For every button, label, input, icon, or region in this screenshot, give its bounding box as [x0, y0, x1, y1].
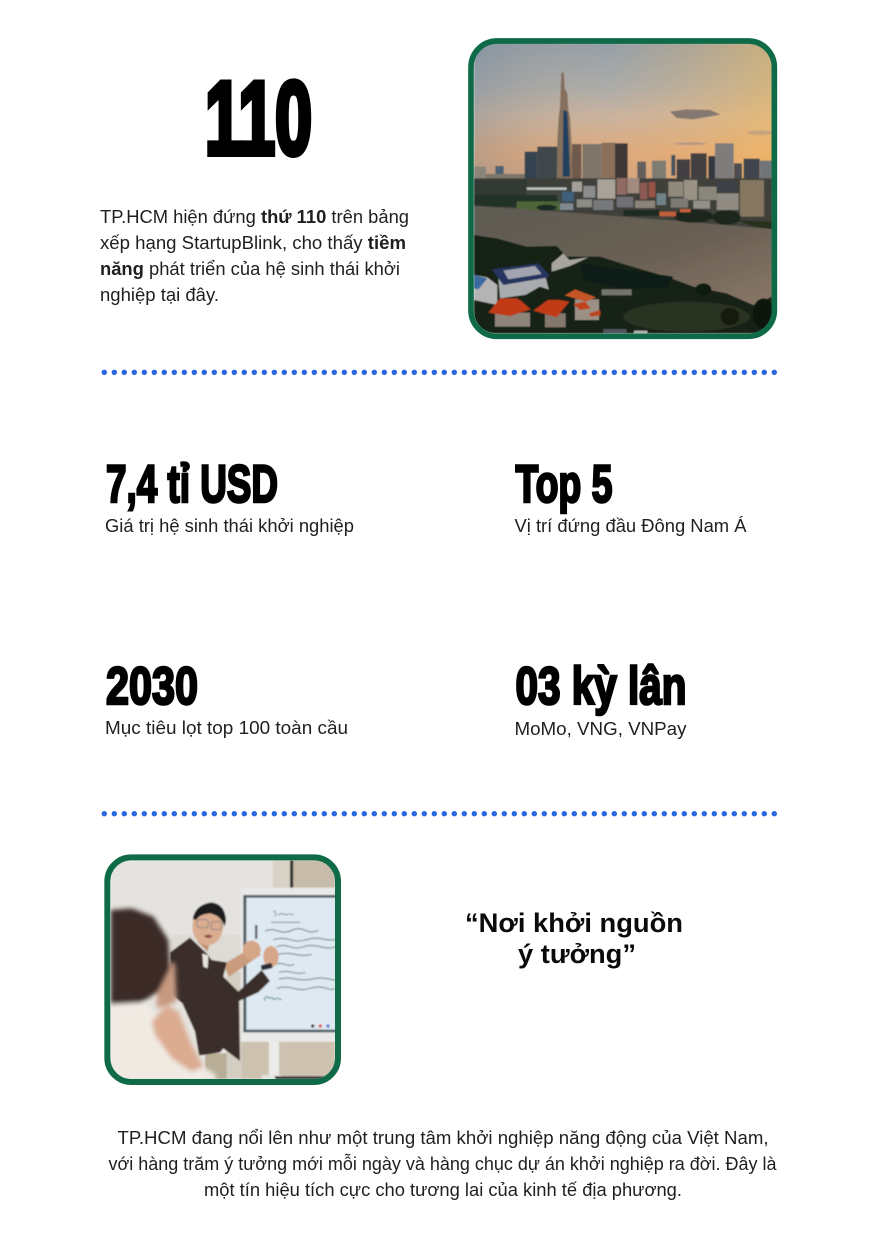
- quote heading: “Nơi khởi nguồn: [465, 908, 683, 938]
- closing paragraph: TP.HCM đang nổi lên như một trung tâm khởi nghiệp năng động của Việt Nam,: [118, 1128, 768, 1148]
- quote heading: ý tưởng”: [518, 939, 636, 969]
- closing paragraph: [108, 1128, 777, 1200]
- stat: 2030: 2030: [106, 657, 198, 716]
- stat: 03 kỳ lân: 03 kỳ lân: [516, 657, 686, 716]
- intro paragraph: [100, 207, 409, 305]
- stat: Top 5: Top 5: [516, 455, 612, 514]
- photo: Ho Chi Minh City skyline at sunset: [471, 41, 774, 336]
- intro paragraph: xếp hạng StartupBlink, cho thấy tiềm: [100, 233, 406, 253]
- stat: 03 kỳ lân: [514, 657, 686, 739]
- closing paragraph: một tín hiệu tích cực cho tương lai của kinh tế địa phương.: [204, 1180, 682, 1200]
- stat: Top 5: [514, 455, 746, 536]
- closing paragraph: với hàng trăm ý tưởng mới mỗi ngày và hàng chục dự án khởi nghiệp ra đời. Đây là: [108, 1153, 777, 1174]
- photo: presenter at whiteboard: [107, 857, 339, 1082]
- stat: 03 kỳ lân: MoMo, VNG, VNPay: [514, 719, 686, 739]
- intro paragraph: năng phát triển của hệ sinh thái khởi: [100, 259, 400, 279]
- intro paragraph: TP.HCM hiện đứng thứ 110 trên bảng: [100, 207, 409, 227]
- stat: 7,4 tỉ USD: 7,4 tỉ USD: [106, 455, 278, 514]
- quote heading: [465, 908, 683, 969]
- stat: 7,4 tỉ USD: Giá trị hệ sinh thái khởi nghiệp: [105, 516, 354, 536]
- intro paragraph: nghiệp tại đây.: [100, 285, 219, 305]
- stat: 2030: [105, 657, 348, 738]
- stat: 2030: Mục tiêu lọt top 100 toàn cầu: [105, 718, 348, 738]
- stat: Top 5: Vị trí đứng đầu Đông Nam Á: [514, 516, 746, 536]
- big number 110: 110: [205, 61, 312, 177]
